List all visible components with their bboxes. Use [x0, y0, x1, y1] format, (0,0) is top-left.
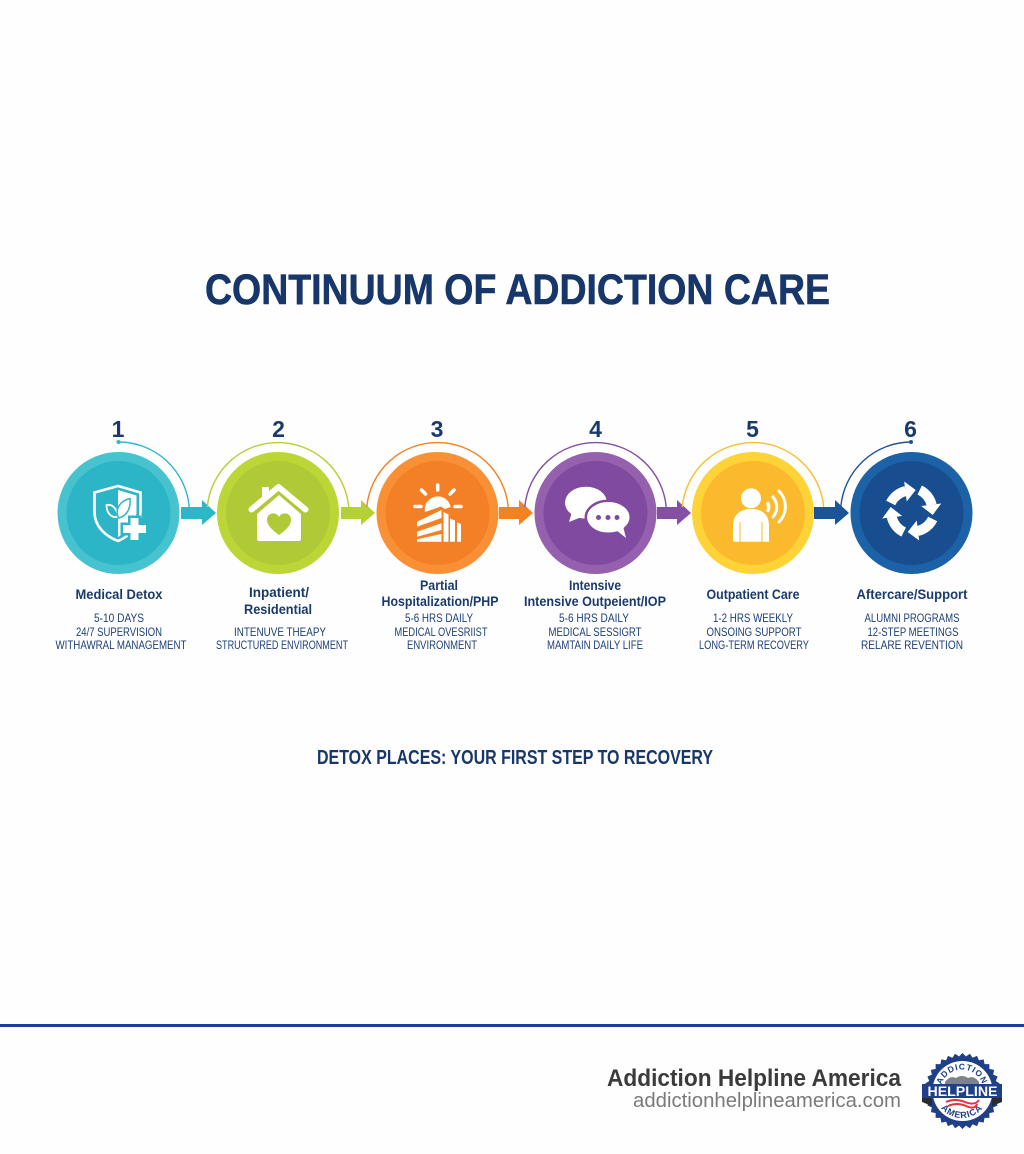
title: CONTINUUM OF ADDICTION CARE — [205, 267, 830, 314]
step 2 number: 2 — [272, 416, 285, 442]
step 2 heading: Residential — [244, 601, 312, 617]
step 2 arrow — [341, 500, 375, 525]
step 5 details: ONSOING SUPPORT — [706, 626, 802, 639]
step 3 circle — [376, 452, 498, 574]
icon: sun and building — [415, 485, 461, 542]
footer brand name: Addiction Helpline America — [607, 1065, 902, 1092]
footer website: addictionhelplineamerica.com — [633, 1090, 901, 1112]
step 5 arc — [682, 443, 824, 507]
step 2 details: STRUCTURED ENVIRONMENT — [216, 639, 348, 652]
step 3 details — [394, 612, 488, 652]
step 6 details: RELARE REVENTION — [861, 639, 963, 652]
step 5: outpatient care — [682, 416, 849, 652]
step 6 details — [861, 612, 963, 652]
step 4 circle — [534, 452, 656, 574]
step 1 arrow — [181, 500, 216, 525]
step 1 heading: Medical Detox — [76, 586, 163, 602]
icon: person with sound waves — [733, 488, 785, 542]
step 5 circle — [692, 452, 814, 574]
step 4 details: MEDICAL SESSIGRT — [548, 626, 642, 639]
subtitle: DETOX PLACES: YOUR FIRST STEP TO RECOVERY — [317, 747, 714, 769]
step 2 heading: Inpatient/ — [249, 584, 309, 600]
step 1 details: 5-10 DAYS — [94, 612, 144, 625]
step 6 heading: Aftercare/Support — [856, 586, 968, 602]
step 2 details — [216, 626, 348, 652]
step 4 heading — [524, 577, 666, 609]
step 4 details: MAMTAIN DAILY LIFE — [547, 639, 643, 652]
step 6 arc — [841, 442, 911, 507]
step 6 details: 12-STEP MEETINGS — [868, 626, 959, 639]
step 1 circle — [58, 452, 180, 574]
step 4 details: 5-6 HRS DAILY — [559, 612, 629, 625]
step 5 details: LONG-TERM RECOVERY — [699, 639, 809, 652]
step 5 heading: Outpatient Care — [706, 586, 800, 602]
step 3 arrow — [499, 500, 533, 525]
step 6: aftercare and support — [841, 416, 972, 652]
step 6 number: 6 — [904, 416, 917, 442]
step 4: intensive outpatient — [524, 416, 691, 652]
step 5 details — [699, 612, 809, 652]
step 1 details: WITHAWRAL MANAGEMENT — [56, 639, 186, 652]
logo: helpline seal: AMERICA — [941, 1105, 982, 1118]
logo: helpline seal: ADDICTION — [937, 1064, 988, 1084]
step 5 details: 1-2 HRS WEEKLY — [713, 612, 793, 625]
step 2 arc — [207, 443, 349, 507]
step 3 details: MEDICAL OVESRIIST — [394, 626, 488, 639]
step 1 details: 24/7 SUPERVISION — [76, 626, 162, 639]
step 4 heading: Intensive — [569, 577, 621, 593]
step 4 number: 4 — [589, 416, 602, 442]
icon: house with heart — [252, 487, 306, 541]
icon: four circular arrows — [882, 482, 941, 540]
step 1 arc — [118, 442, 189, 507]
step 3 details: 5-6 HRS DAILY — [405, 612, 473, 625]
step 3 heading: Hospitalization/PHP — [382, 593, 498, 609]
logo: helpline seal: HELPLINE — [928, 1084, 998, 1099]
step 4 arrow — [657, 500, 691, 525]
step 2 circle — [217, 452, 339, 574]
step 2 details: INTENUVE THEAPY — [234, 626, 326, 639]
step 2: inpatient residential — [207, 416, 375, 652]
step 1: medical detox — [56, 416, 216, 652]
step 3 details: ENVIRONMENT — [407, 639, 477, 652]
step 1 number: 1 — [112, 416, 125, 442]
step 4 heading: Intensive Outpeient/IOP — [524, 593, 666, 609]
footer divider — [0, 1024, 1024, 1027]
step 2 heading — [244, 584, 312, 617]
icon: speech bubbles — [565, 487, 631, 538]
step 5 arrow — [814, 500, 849, 525]
step 4 details — [547, 612, 643, 652]
step 1 details — [56, 612, 186, 652]
step 3 heading — [382, 577, 498, 609]
step 3 heading: Partial — [420, 577, 458, 593]
step 3 number: 3 — [431, 416, 443, 442]
logo: helpline seal — [922, 1053, 1002, 1129]
step 6 details: ALUMNI PROGRAMS — [864, 612, 960, 625]
step 6 circle — [850, 452, 972, 574]
step 5 number: 5 — [746, 416, 759, 442]
step 3: partial hospitalization — [367, 416, 533, 652]
step 3 arc — [367, 443, 508, 507]
step 4 arc — [525, 443, 666, 507]
icon: shield with leaf and plus — [94, 486, 146, 541]
